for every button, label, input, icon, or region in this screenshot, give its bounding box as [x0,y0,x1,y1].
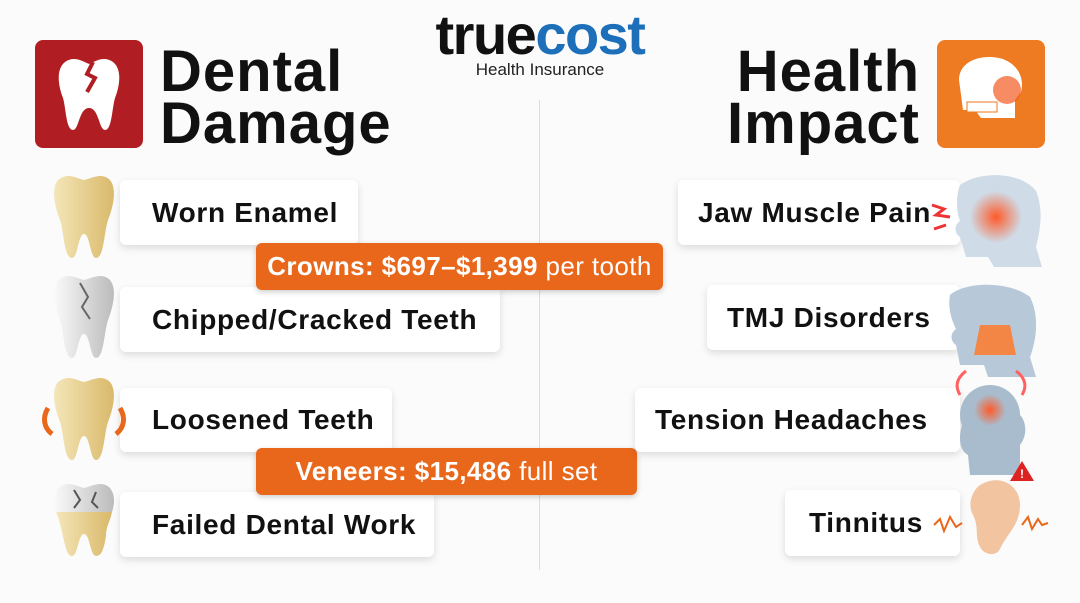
card: Tension Headaches: Tension Headaches [655,404,928,435]
card: TMJ Disorders: TMJ Disorders [727,302,931,332]
title: Health Impact: Impact [727,91,920,156]
card: Loosened Teeth: Loosened Teeth [152,404,374,435]
title: Dental Damage [160,39,392,156]
card: Loosened Teeth [120,388,392,452]
icons: health: ! [1020,467,1024,481]
icons: teeth [42,176,126,556]
title: Health Impact: Health [737,39,920,104]
badge: veneers: full set [519,456,597,486]
card: Failed Dental Work: Failed Dental Work [152,508,416,540]
card: TMJ Disorders [707,285,960,350]
card: Worn Enamel: Worn Enamel [152,196,338,228]
icons: health [932,175,1048,554]
icon: dental damage [35,40,143,148]
card: Worn Enamel [120,180,358,245]
logo: Health Insurance [476,60,604,79]
card: Jaw Muscle Pain [678,180,960,245]
title: Dental Damage: Dental [160,39,343,104]
divider [539,100,540,570]
logo: truecost [436,3,644,66]
card: Tension Headaches [635,388,960,452]
badge: crowns: Crowns: $697–$1,399 [267,251,538,281]
badge: crowns [256,243,663,290]
card: Chipped/Cracked Teeth: Chipped/Cracked Teeth [152,304,477,334]
card: Chipped/Cracked Teeth [120,287,500,352]
icon: health impact [937,40,1045,148]
card: Jaw Muscle Pain: Jaw Muscle Pain [698,196,931,228]
title: Dental Damage: Damage [160,91,392,156]
card: Failed Dental Work [120,492,434,557]
card: Tinnitus [785,490,960,556]
badge: veneers [256,448,637,495]
badge: veneers: Veneers: $15,486 [296,456,512,486]
card: Tinnitus: Tinnitus [809,507,923,538]
title: Health Impact [727,39,920,156]
badge: crowns: per tooth [546,251,652,281]
